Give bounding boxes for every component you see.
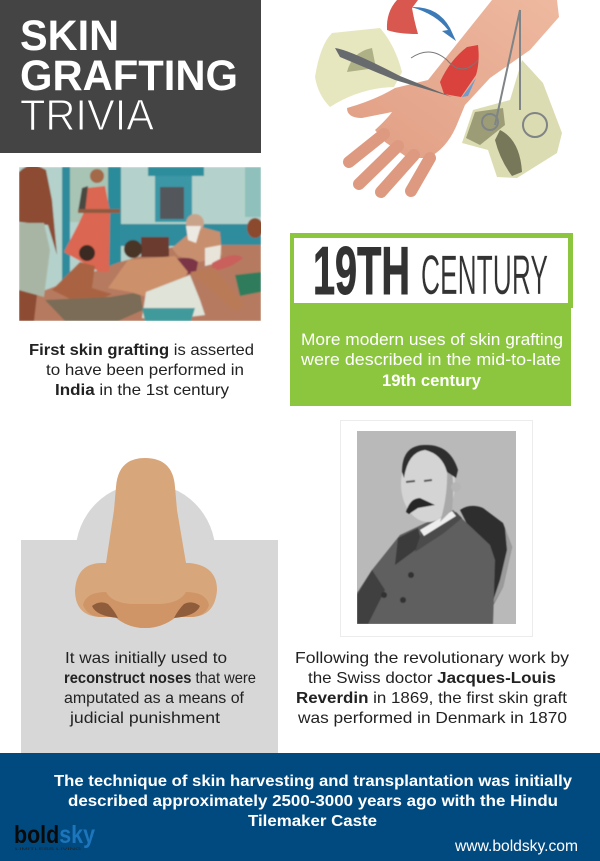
title: TRIVIA <box>20 91 155 140</box>
text: first skin grafting <box>29 342 254 399</box>
text: first skin grafting: to have been performed in <box>46 362 244 379</box>
text: Reverdin: Reverdin in 1869, the first skin graft <box>296 690 568 707</box>
title panel <box>0 0 261 153</box>
patient <box>108 240 261 321</box>
website url: www.boldsky.com <box>454 838 578 855</box>
panel: 19th century <box>290 233 573 406</box>
text: reconstruct noses: reconstruct noses that were <box>64 670 256 687</box>
bearded surgeon <box>141 214 243 275</box>
logo: boldsky: boldsky <box>14 821 95 849</box>
standing man left <box>19 165 57 321</box>
chair <box>460 505 512 604</box>
logo: boldsky: LIMITLESS LIVING <box>15 847 82 851</box>
coat <box>357 510 495 624</box>
text: modern uses: were described in the mid-to-late <box>300 351 561 369</box>
footer text: Tilemaker Caste <box>248 813 377 830</box>
framed portrait: Jacques-Louis Reverdin <box>340 420 533 637</box>
panel: nose <box>21 458 278 753</box>
title <box>20 12 238 140</box>
title: SKIN <box>20 12 119 60</box>
arrow <box>411 7 456 41</box>
footer text <box>54 773 572 830</box>
boy sitting <box>45 245 143 321</box>
forearm and palm <box>347 0 559 158</box>
head <box>401 446 455 522</box>
text: reconstruct noses: amputated as a means of <box>64 690 245 707</box>
mesh graft <box>387 0 418 34</box>
forceps <box>482 10 547 137</box>
text: modern uses: More modern uses of skin grafting <box>301 331 563 349</box>
woman in red sari <box>64 169 120 272</box>
right gloved hand <box>462 60 562 178</box>
text: Reverdin: was performed in Denmark in 1870 <box>297 710 567 727</box>
text: reconstruct noses: It was initially used to <box>65 650 227 667</box>
graft skin patch <box>440 45 479 97</box>
left gloved hand <box>315 28 402 107</box>
icon: nose <box>75 458 217 628</box>
scalpel <box>335 48 452 97</box>
painting: ancient Indian surgery <box>19 165 263 321</box>
text: reconstruct noses: judicial punishment <box>69 710 221 727</box>
title: GRAFTING <box>20 52 238 100</box>
heading: 19th century: 19TH <box>313 233 410 309</box>
illustration: surgical hand with skin graft <box>315 0 562 192</box>
text: reconstruct noses <box>64 650 256 727</box>
text: Reverdin: Following the revolutionary work by <box>295 650 569 667</box>
footer text: The technique of skin harvesting and transplantation was initially <box>54 773 572 790</box>
text: modern uses: 19th century <box>382 372 482 390</box>
text: first skin grafting: India in the 1st century <box>55 382 229 399</box>
footer text: described approximately 2500-3000 years ago with the Hindu <box>68 793 558 810</box>
text: modern uses <box>300 331 563 390</box>
wall window <box>148 167 204 222</box>
text: first skin grafting: First skin grafting is asserted <box>29 342 254 359</box>
footer band <box>0 753 600 861</box>
text: Reverdin: the Swiss doctor Jacques-Louis <box>308 670 556 687</box>
text: Reverdin <box>295 650 569 727</box>
